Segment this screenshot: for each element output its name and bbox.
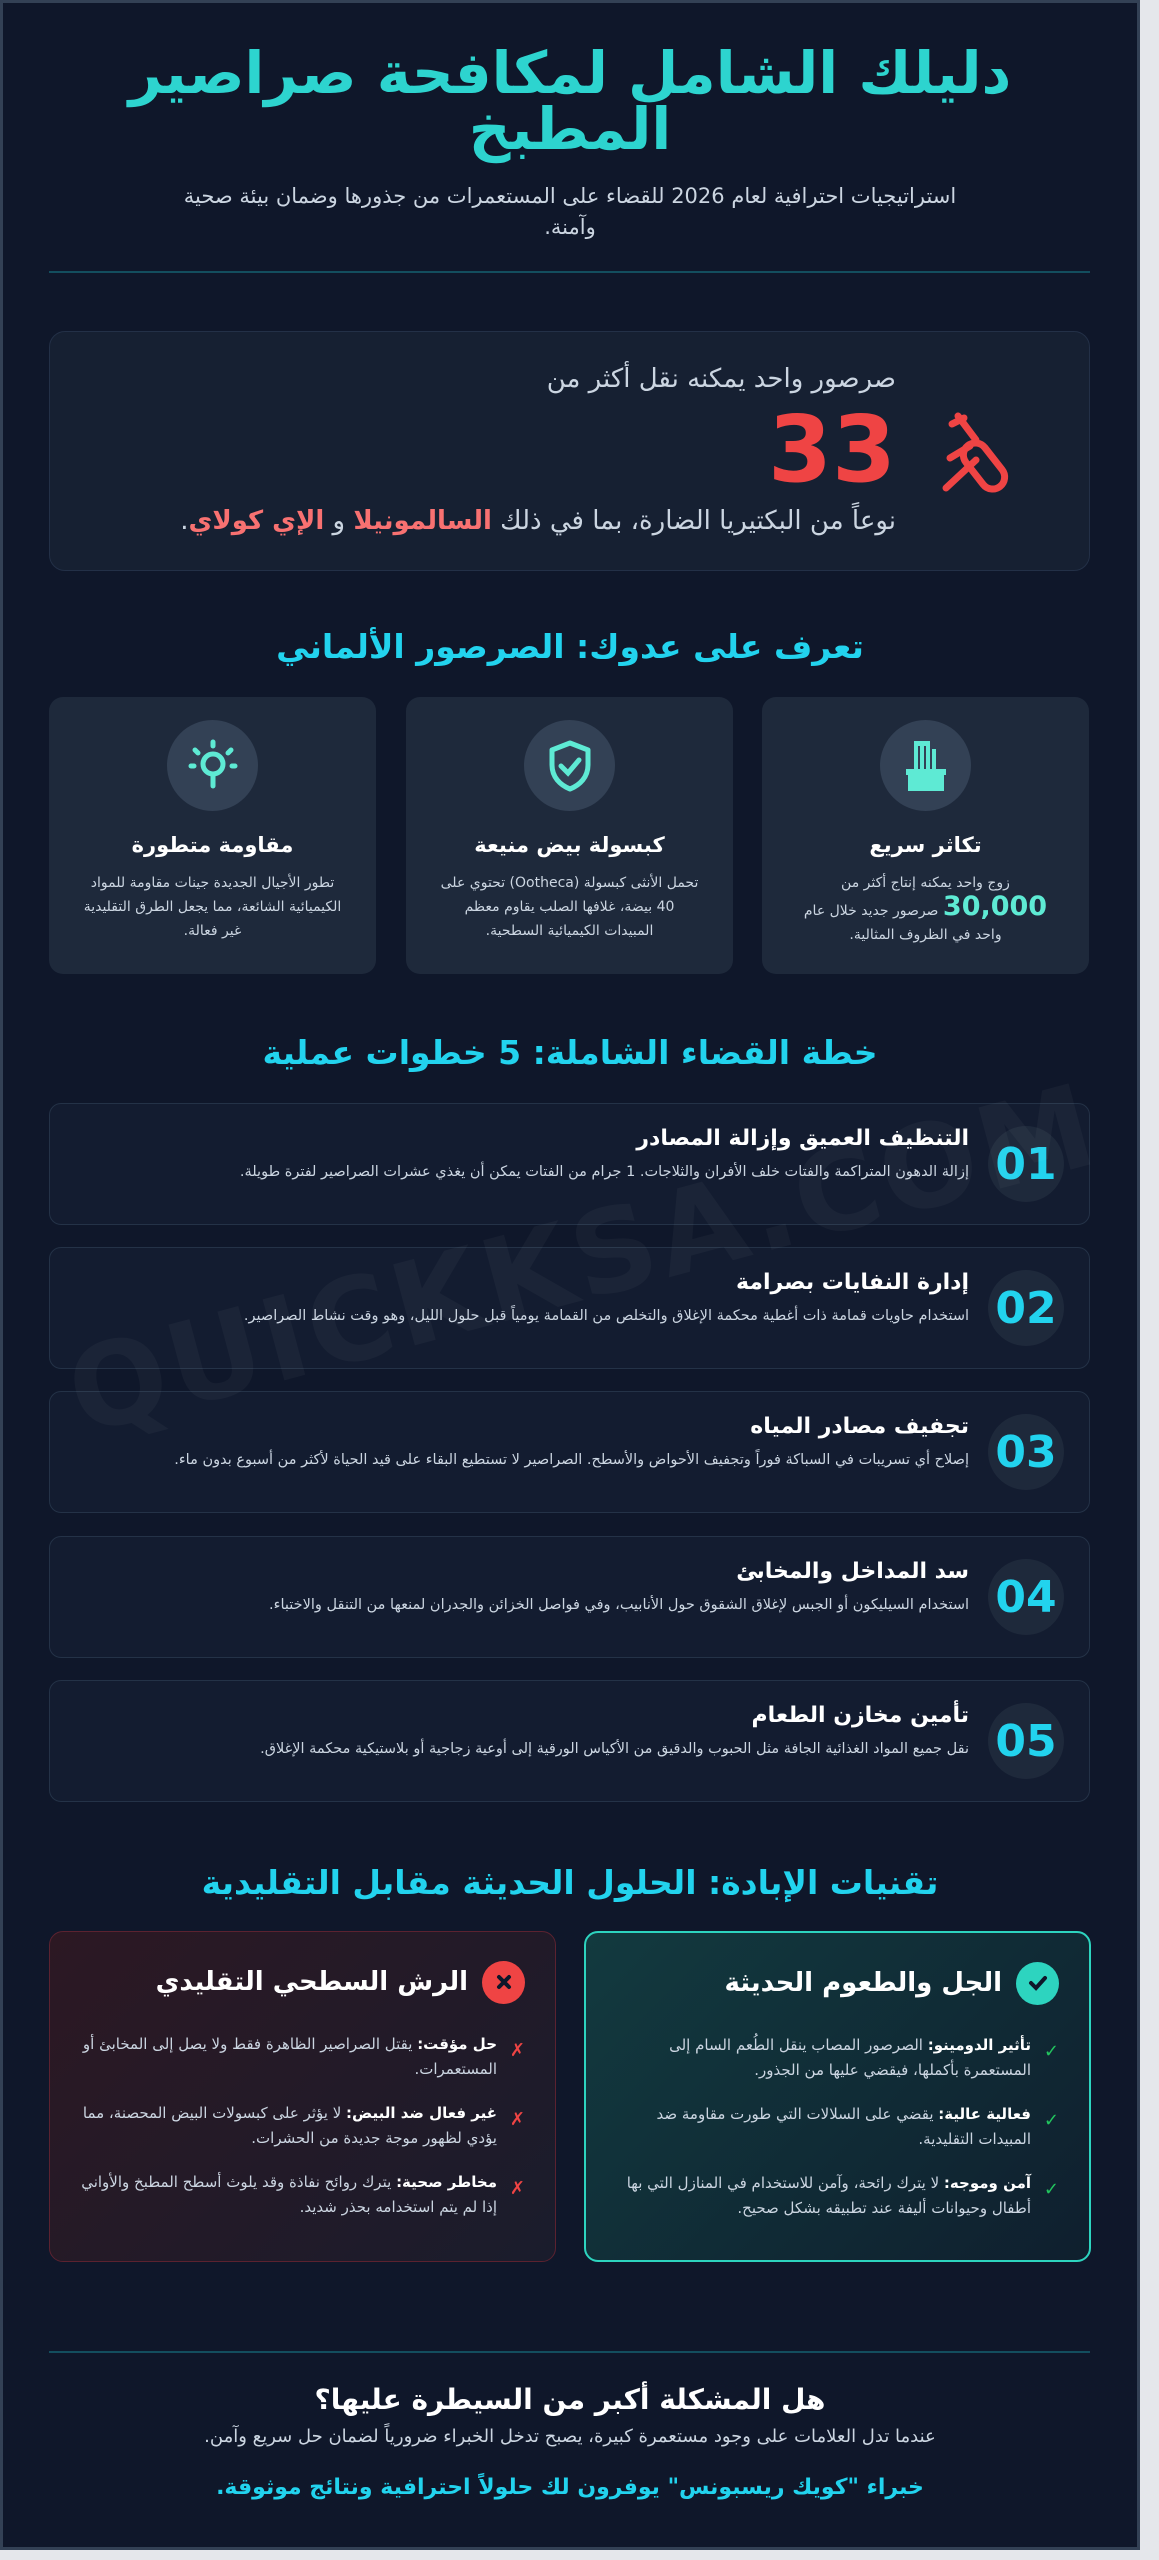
step 01: 01 [995,1138,1057,1190]
card: resistance: تطور الأجيال الجديدة جينات مقاومة للمواد [91,875,334,891]
step 02 [49,1247,1090,1369]
stat text [180,361,896,536]
panel: traditional: الرش السطحي التقليدي [156,1967,468,1997]
step 04: 04 [995,1572,1057,1622]
panel: modern [584,1931,1091,2262]
subtitle: وآمنة. [544,215,596,239]
panel: traditional [49,1931,556,2262]
card: rapid reproduction: تكاثر سريع [869,833,982,857]
step 05: تأمين مخازن الطعام [752,1703,969,1728]
card: rapid reproduction: 30,000 صرصور جديد خلال عام [804,891,1047,922]
panel: modern: ✓ [1044,2179,1059,2200]
card: egg capsule: تحمل الأنثى كبسولة (Ootheca) تحتوي على [441,875,698,891]
step 04 [49,1536,1090,1658]
step 02: استخدام حاويات قمامة ذات أغطية محكمة الإغلاق والتخلص من القمامة يومياً قبل حلول الليل، وهو وقت نشاط الصراصير. [244,1308,969,1324]
icon: shield [524,720,615,811]
panel: modern: آمن وموجه: لا يترك رائحة، وآمن للاستخدام في المنازل التي بها أطفال وحيوانات أليفة عند تطبيقه بشكل صحيح. [627,2174,1031,2217]
CTA highlight: خبراء "كويك ريسبونس" يوفرون لك حلولاً احترافية ونتائج موثوقة. [216,2475,924,2500]
step 03 [49,1391,1090,1513]
card: resistance: مقاومة متطورة [132,833,293,857]
panel: modern: ✓ [1044,2110,1059,2131]
panel: modern: ✓ [1044,2041,1059,2062]
step 02: 02 [995,1282,1057,1334]
CTA heading: هل المشكلة أكبر من السيطرة عليها؟ [315,2383,825,2416]
heading: plan: خطة القضاء الشاملة: 5 خطوات عملية [262,1033,878,1072]
card: egg capsule: المبيدات الكيميائية السطحية. [486,923,653,939]
card: resistance [49,697,376,974]
subtitle: استراتيجيات احترافية لعام 2026 للقضاء على المستعمرات من جذورها وضمان بيئة صحية [184,184,956,208]
panel: traditional: ✗ [510,2178,525,2199]
panel: traditional: مخاطر صحية: يترك روائح نفاذة وقد يلوث أسطح المطبخ والأواني إذا لم يتم استخدامه بحذر شديد. [81,2173,497,2216]
step 03: 03 [995,1426,1057,1478]
CTA text: عندما تدل العلامات على وجود مستعمرة كبيرة، يصبح تدخل الخبراء ضرورياً لضمان حل سريع وآمن. [204,2426,936,2447]
panel: modern: فعالية عالية: يقضي على السلالات التي طورت مقاومة ضد المبيدات التقليدية. [656,2105,1031,2148]
card: resistance: غير فعالة. [184,923,241,939]
panel: traditional: غير فعال ضد البيض: لا يؤثر على كبسولات البيض المحصنة، مما يؤدي لظهور موجة جديدة من الحشرات. [83,2104,497,2147]
step 03: إصلاح أي تسريبات في السباكة فوراً وتجفيف الأحواض والأسطح. الصراصير لا تستطيع البقاء على قيد الحياة لأكثر من أسبوع بدون ماء. [174,1452,969,1468]
heading: comparison: تقنيات الإبادة: الحلول الحديثة مقابل التقليدية [202,1863,938,1902]
panel: modern: تأثير الدومينو: الصرصور المصاب ينقل الطُعم السام إلى المستعمرة بأكملها، فيقضي عليها من الجذور. [669,2036,1031,2079]
stat text: صرصور واحد يمكنه نقل أكثر من [547,364,896,394]
step 05: نقل جميع المواد الغذائية الجافة مثل الحبوب والدقيق من الأكياس الورقية إلى أوعية زجاجية أو بلاستيكية محكمة الإغلاق. [260,1741,969,1757]
step 05: 05 [995,1716,1057,1766]
icon: bulb [167,720,258,811]
card: rapid reproduction: واحد في الظروف المثالية. [849,927,1002,943]
step 01: إزالة الدهون المتراكمة والفتات خلف الأفران والثلاجات. 1 جرام من الفتات يمكن أن يغذي عشرات الصراصير لفترة طويلة. [240,1164,969,1180]
card: rapid reproduction: زوج واحد يمكنه إنتاج أكثر من [841,875,1010,891]
card: rapid reproduction [762,697,1089,974]
stat card [49,331,1090,571]
panel: traditional: ✗ [510,2109,525,2130]
stat text: 33 [768,396,896,503]
step 02: إدارة النفايات بصرامة [736,1270,969,1295]
card: resistance: الكيميائية الشائعة، مما يجعل الطرق التقليدية [84,899,341,915]
watermark: QUICKKSA.COM [54,1058,1112,1462]
icon: building [880,720,971,811]
heading: know your enemy: تعرف على عدوك: الصرصور الألماني [276,627,864,666]
step 03: تجفيف مصادر المياه [750,1414,969,1439]
title: دليلك الشامل لمكافحة صراصير المطبخ [129,39,1011,163]
card: egg capsule: كبسولة بيض منيعة [474,833,665,857]
step 01: التنظيف العميق وإزالة المصادر [636,1126,969,1151]
step 05 [49,1680,1090,1802]
panel: traditional: حل مؤقت: يقتل الصراصير الظاهرة فقط ولا يصل إلى المخابئ أو المستعمرات. [83,2035,497,2078]
step 04: سد المداخل والمخابئ [736,1559,969,1584]
step 01 [49,1103,1090,1225]
panel: modern: الجل والطعوم الحديثة [724,1968,1002,1998]
card: egg capsule [406,697,733,974]
subtitle [184,184,956,239]
step 04: استخدام السيليكون أو الجبس لإغلاق الشقوق حول الأنابيب، وفي فواصل الخزائن والجدران لمنعها من التنقل والاختباء. [269,1597,969,1613]
stat text: نوعاً من البكتيريا الضارة، بما في ذلك السالمونيلا و الإي كولاي. [180,506,896,536]
icon: bacteria syringe [942,412,1008,492]
panel: traditional: ✗ [510,2040,525,2061]
card: egg capsule: 40 بيضة، غلافها الصلب يقاوم معظم [465,899,674,915]
